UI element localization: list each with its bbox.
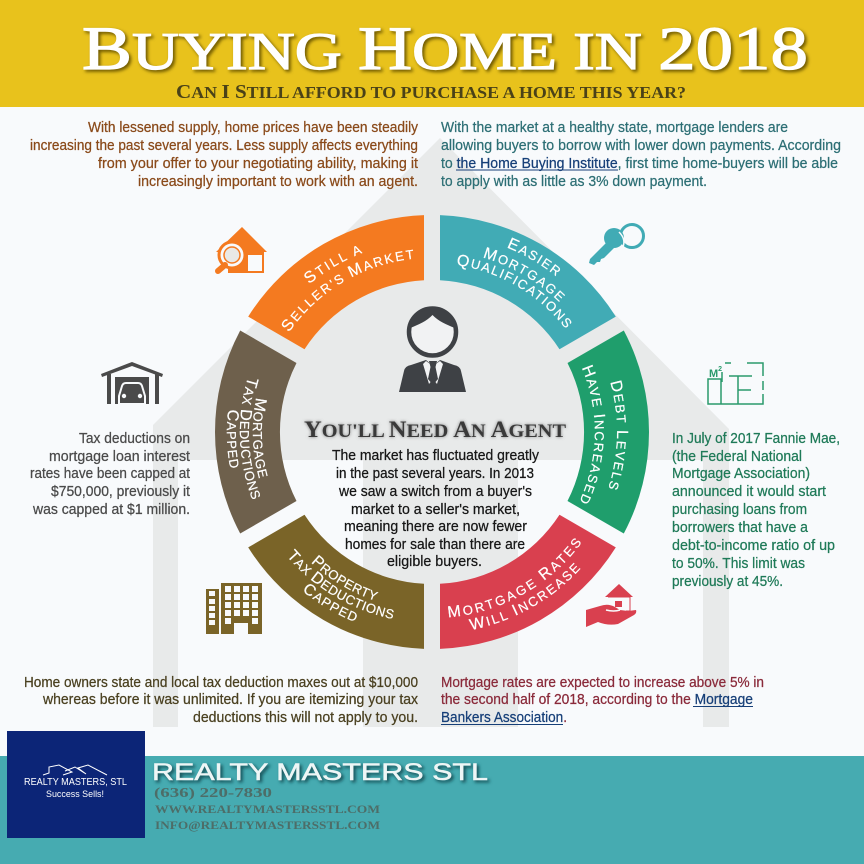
footer company name: REALTY MASTERS STL [152,759,488,786]
text: mortgage rates description: the second half of 2018, according to the Mortgage [441,691,753,708]
label: TAX D EDUCTIONS [240,379,260,499]
text: center description: in the past several years. In 2013 [336,465,534,482]
text: mortgage qualifications description [441,119,841,190]
text: debt levels description: In July of 2017 Fannie Mae, [672,430,840,447]
text: mortgage interest deduction description: $750,000, previously it [51,483,191,500]
text: debt levels description: Mortgage Association) [672,465,810,482]
text: mortgage interest deduction description: mortgage loan interest [49,448,191,465]
text: center description: meaning there are now fewer [344,518,527,535]
text: property tax description [24,674,418,726]
title: BUYING HOME IN 2018 [82,16,808,83]
text: mortgage interest deduction description: Tax deductions on [79,430,190,447]
header band [0,0,864,107]
floor plan label: M [709,368,718,380]
label: EASIER [508,238,560,276]
label: WILL INCREASE [468,562,580,630]
label: D EBT L EVELS [609,380,628,490]
text: seller's market description: from your offer to your negotiating ability, making it [98,155,419,172]
label: TAX DEDUCTIONS [289,548,394,618]
icon: floor plan [708,363,763,404]
text: seller's market description: increasing the past several years. Less supply affects everything [30,137,418,154]
text: debt levels description [672,430,840,590]
label [580,364,628,504]
icon: garage [101,362,163,404]
footer company name: REALTY MASTERS STL [154,761,490,788]
label: HAVE I NCREASED [580,364,606,504]
text: center description: homes for sale than there are [345,536,525,553]
label: QUALIFICATIONS [458,254,572,328]
logo box: Success Sells! [46,789,104,800]
segment: mortgage tax deductions capped [215,330,296,534]
label: MORTGAGE [484,247,566,302]
text: debt levels description: (the Federal National [672,448,802,465]
footer contact details [154,785,380,832]
text: debt levels description: previously at 45%. [672,573,783,590]
text: mortgage interest deduction description: was capped at $1 million. [32,501,190,518]
text: center description: The market has fluctuated greatly [332,447,539,464]
text: debt levels description: borrowers that have a [672,519,809,536]
footer band [0,756,864,864]
footer contact details: INFO@REALTYMASTERSSTL.COM [155,818,380,832]
text: property tax description: deductions this will not apply to you. [193,709,418,726]
text: seller's market description: With lessened supply, home prices have been steadily [88,119,418,136]
label: PROPERTY [312,554,378,600]
segment: debt levels have increased [568,330,649,534]
text: property tax description: Home owners state and local tax deduction maxes out at $10,000 [24,674,418,691]
segment: still a seller's market [248,215,424,350]
footer contact details: (636) 220-7830 [154,785,272,800]
text: debt levels description: debt-to-income ratio of up [672,537,835,554]
label: MORTGAGE RATES [448,538,581,618]
heading: you'll need an agent: YOU'LL NEED AN AGENT [304,417,566,442]
text: debt levels description: to 50%. This limit was [672,555,805,572]
label: STILL A [304,246,362,283]
icon: agent [399,308,466,392]
text: property tax description: whereas before it was unlimited. If you are itemizing your tax [42,691,418,708]
icon: house with magnifier [216,227,267,273]
text: debt levels description: announced it would start [672,483,827,500]
segment: property tax deductions capped [248,514,424,649]
text: mortgage rates description [441,674,764,726]
text: mortgage qualifications description: With the market at a healthy state, mortgage lenders are [441,119,788,136]
text: center description: market to a seller's market, [351,501,520,518]
text: seller's market description: increasingly important to work with an agent. [138,173,418,190]
text: mortgage rates description: Mortgage rates are expected to increase above 5% in [441,674,764,691]
footer contact details: WWW.REALTYMASTERSSTL.COM [155,802,380,816]
icon: office building [206,583,262,634]
logo box [7,731,145,838]
text: mortgage qualifications description: to apply with as little as 3% down payment. [441,173,707,190]
floor plan label: 2 [718,366,722,373]
text: mortgage interest deduction description [30,430,191,518]
segment: mortgage rates will increase [440,514,616,649]
subtitle: CAN I STILL AFFORD TO PURCHASE A HOME THIS YEAR? [176,81,686,103]
title shadow: BUYING HOME IN 2018 [84,18,810,85]
text: center description: eligible buyers. [387,553,482,570]
background house silhouette [153,138,729,727]
label [226,379,268,499]
icon: hand holding house [586,584,636,627]
text: debt levels description: purchasing loans from [672,501,807,518]
segment: easier mortgage qualifications [440,215,616,350]
text: mortgage qualifications description: to the Home Buying Institute, first time home-buyers will be able [441,155,838,172]
text: mortgage qualifications description: allowing buyers to borrow with lower down payments. According [441,137,841,154]
text: mortgage interest deduction description: rates have been capped at [30,465,191,482]
text: mortgage rates description: Bankers Association. [441,709,567,726]
text: center description: we saw a switch from a buyer's [338,483,532,500]
icon: key [589,224,644,265]
text: center description [332,447,539,570]
heading: you'll need an agent: YOU'LL NEED AN AGENT [304,417,566,442]
label: C APPED [226,410,239,468]
label: SELLER'S MARKET [282,250,414,331]
logo box: REALTY MASTERS, STL [24,776,127,788]
label: M ORTGAGE [252,398,268,478]
label: CAPPED [304,584,357,621]
text: seller's market description [30,119,419,190]
